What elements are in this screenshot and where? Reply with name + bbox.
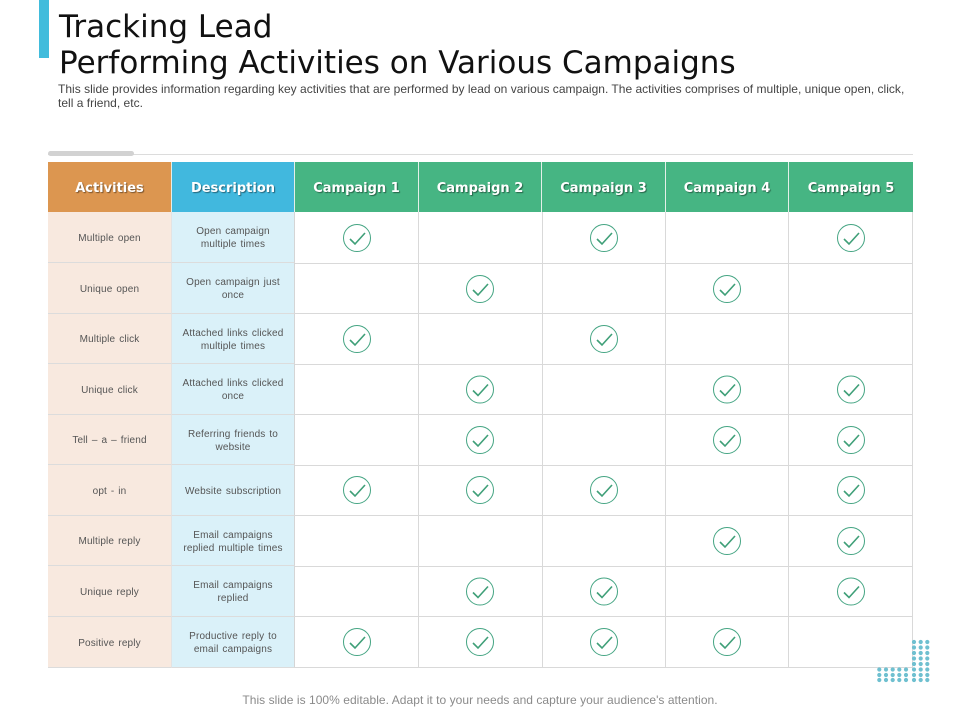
description: Attached links clicked once: once [222, 391, 244, 402]
header: Description: Description [191, 181, 275, 196]
description: Attached links clicked multiple times: multiple times [201, 340, 265, 352]
description: Open campaign multiple times: Open campaign [196, 226, 270, 237]
title: Tracking Lead [59, 9, 272, 45]
subtitle text: This slide provides information regarding key activities that are performed by lead on various campaign. The activities comprises of multiple, unique open, click, [58, 82, 904, 96]
activity: Multiple reply [48, 516, 172, 566]
description: Email campaigns replied: replied [217, 593, 249, 604]
description: Email campaigns replied multiple times [172, 516, 295, 566]
activity: Positive reply: Positive reply [78, 638, 141, 648]
dot pattern [877, 640, 930, 682]
subtitle text: tell a friend, etc. [58, 96, 143, 110]
header: Campaign 5: Campaign 5 [808, 181, 894, 196]
description: Email campaigns replied: Email campaigns [193, 580, 273, 591]
description: Attached links clicked multiple times: Attached links clicked [183, 328, 283, 338]
header: Campaign 4: Campaign 4 [684, 181, 770, 196]
title accent bar [39, 0, 49, 58]
table [48, 162, 913, 668]
activity: Multiple reply: Multiple reply [78, 536, 140, 547]
description: Open campaign just once [172, 263, 295, 314]
description: Attached links clicked once [172, 364, 295, 415]
header: Campaign 1 [295, 162, 419, 212]
description: Referring friends to website: Referring friends to [188, 428, 278, 440]
activity: Multiple open [48, 212, 172, 263]
activity: Unique open [48, 263, 172, 314]
description: Email campaigns replied [172, 566, 295, 617]
header: Campaign 2 [419, 162, 542, 212]
header: Campaign 1: Campaign 1 [313, 181, 400, 196]
description: Productive reply to email campaigns: Productive reply to [189, 631, 277, 642]
description: Open campaign multiple times: multiple times [201, 239, 265, 250]
header: Campaign 3: Campaign 3 [560, 181, 647, 196]
activity: Unique reply [48, 566, 172, 617]
title [58, 9, 736, 81]
activity: Unique reply: Unique reply [80, 586, 139, 598]
header: Activities: Activities [75, 181, 144, 196]
activity: Tell a friend: Tell – a – friend [72, 435, 147, 446]
description: Productive reply to email campaigns: email campaigns [194, 644, 272, 655]
header: Campaign 4 [666, 162, 789, 212]
header: Campaign 2: Campaign 2 [437, 181, 523, 196]
description: Email campaigns replied multiple times: replied multiple times [183, 542, 283, 554]
activity: Positive reply [48, 617, 172, 668]
description: Website subscription [172, 465, 295, 516]
activity: Multiple click: Multiple click [80, 334, 139, 345]
description: Open campaign just once: once [222, 290, 244, 301]
activity: Multiple click [48, 314, 172, 364]
description: Referring friends to website: website [216, 442, 250, 452]
activity: opt-in [48, 465, 172, 516]
activity: Multiple open: Multiple open [78, 232, 141, 244]
header: Campaign 3 [542, 162, 666, 212]
activity: opt-in: opt - in [93, 486, 126, 496]
description: Email campaigns replied multiple times: Email campaigns [193, 530, 273, 540]
title: Performing Activities on Various Campaigns [59, 45, 736, 81]
activity: Tell a friend [48, 415, 172, 465]
activity: Unique open: Unique open [80, 284, 139, 294]
footer note: This slide is 100% editable. Adapt it to your needs and capture your audience's attention. [242, 693, 718, 707]
description: Referring friends to website [172, 415, 295, 465]
description: Open campaign multiple times [172, 212, 295, 263]
activity: Unique click: Unique click [81, 384, 138, 396]
description: Website subscription: Website subscription [185, 486, 281, 496]
subtitle text [58, 82, 904, 110]
description: Productive reply to email campaigns [172, 617, 295, 668]
description: Attached links clicked once: Attached links clicked [183, 378, 283, 389]
header: Description [172, 162, 295, 212]
activity: Unique click [48, 364, 172, 415]
divider with grey tab [48, 151, 913, 156]
header: Campaign 5 [789, 162, 913, 212]
description: Open campaign just once: Open campaign just [186, 277, 280, 288]
description: Attached links clicked multiple times [172, 314, 295, 364]
header: Activities [48, 162, 172, 212]
